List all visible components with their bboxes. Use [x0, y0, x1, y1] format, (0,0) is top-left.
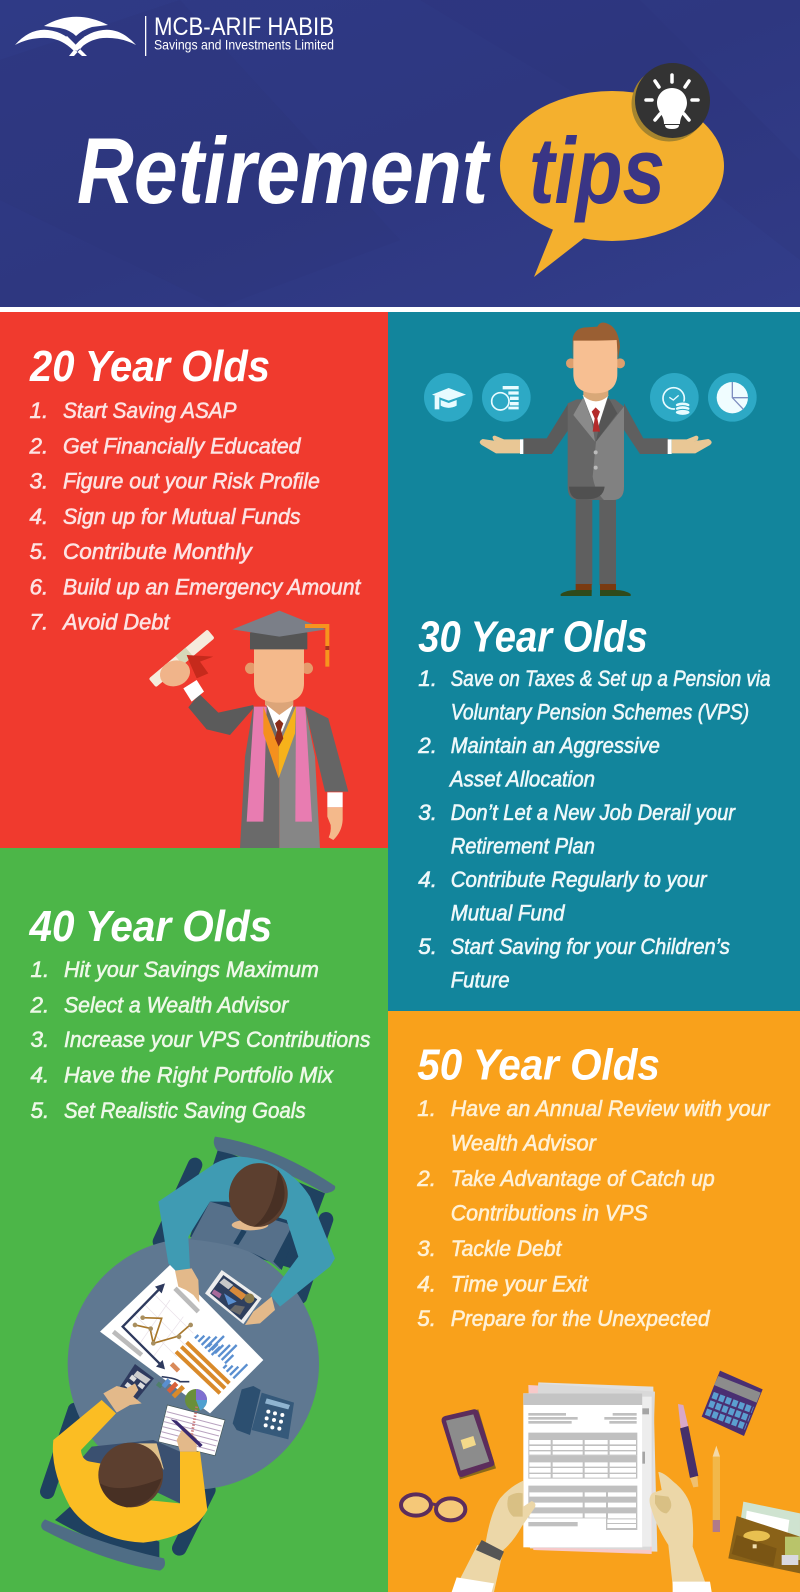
list: 5. [30, 1098, 49, 1123]
list: 4. [30, 1062, 49, 1088]
list: Contribute Regularly to your [451, 867, 708, 892]
icon: clock and coins [650, 373, 699, 422]
icon: pie chart [708, 373, 757, 422]
logo text: Savings and Investments Limited [154, 36, 334, 52]
list: Time your Exit [451, 1272, 589, 1296]
list: Hit your Savings Maximum [64, 957, 319, 982]
illustration: paperwork on desk [401, 1371, 800, 1592]
list: 1. [30, 957, 49, 982]
list: 3. [30, 468, 48, 494]
list: Voluntary Pension Schemes (VPS) [451, 699, 749, 724]
list [416, 1096, 771, 1331]
list: 1. [30, 398, 48, 423]
list: 3. [418, 800, 437, 825]
list [417, 666, 770, 992]
list: Contribute Monthly [63, 539, 254, 564]
list: Start Saving ASAP [63, 398, 236, 423]
hands [453, 1472, 705, 1592]
heading: 20 Year Olds [29, 342, 270, 391]
list: 1. [418, 666, 437, 691]
list: 5. [418, 934, 437, 959]
document with charts [100, 1265, 263, 1413]
list: 2. [30, 992, 49, 1018]
list: Have an Annual Review with your [451, 1096, 771, 1121]
icon: light bulb [632, 63, 710, 142]
panel: 50 year olds [388, 1011, 800, 1592]
list: 2. [416, 1166, 436, 1191]
list: 4. [30, 504, 48, 529]
list: Tackle Debt [451, 1236, 563, 1261]
calculator [120, 1364, 154, 1400]
list: 2. [28, 434, 48, 458]
list: 4. [418, 867, 437, 892]
list: Sign up for Mutual Funds [63, 504, 300, 529]
illustration: meeting at round table [41, 1137, 335, 1571]
panel: header [0, 0, 800, 307]
list: Build up an Emergency Amount [63, 574, 362, 600]
list: Mutual Fund [451, 900, 566, 925]
list: Retirement Plan [451, 833, 595, 858]
glasses [401, 1494, 465, 1520]
list: 2. [417, 733, 437, 758]
heading: 50 Year Olds [417, 1040, 660, 1090]
list: Set Realistic Saving Goals [64, 1098, 306, 1123]
list: 5. [30, 539, 48, 564]
pencil [713, 1446, 720, 1532]
list: Take Advantage of Catch up [451, 1166, 715, 1191]
list: Maintain an Aggressive [451, 733, 660, 758]
illustration: graduate [149, 611, 348, 848]
list: Avoid Debt [61, 610, 171, 634]
icon: graduation cap [424, 373, 473, 422]
icon: logo bird [15, 17, 136, 56]
list: Wealth Advisor [451, 1130, 597, 1156]
list: Asset Allocation [448, 766, 595, 791]
list: Figure out your Risk Profile [63, 468, 320, 494]
list: Have the Right Portfolio Mix [64, 1062, 334, 1088]
list: Increase your VPS Contributions [64, 1027, 370, 1052]
list: 3. [417, 1236, 436, 1261]
panel: 20 year olds [0, 312, 388, 848]
list: 7. [30, 610, 48, 634]
list [28, 398, 362, 634]
heading: 40 Year Olds [29, 902, 272, 951]
stacked papers [523, 1382, 657, 1554]
panel: 40 year olds [0, 848, 388, 1592]
list: Select a Wealth Advisor [64, 992, 290, 1018]
list [30, 957, 370, 1123]
speech bubble with tips [500, 91, 724, 277]
pen [678, 1404, 698, 1487]
logo text [154, 13, 334, 52]
list: Don’t Let a New Job Derail your [451, 800, 736, 825]
icon: coins [482, 373, 531, 422]
list: 4. [417, 1272, 436, 1296]
notebook [158, 1405, 225, 1456]
calculator [702, 1371, 763, 1436]
logo text: MCB-ARIF HABIB [154, 13, 334, 41]
logo [15, 13, 334, 56]
list: Contributions in VPS [451, 1200, 648, 1226]
heading: 30 Year Olds [418, 612, 648, 662]
list: Future [451, 967, 510, 992]
panel: 30 year olds [388, 312, 800, 1011]
list: Start Saving for your Children’s [451, 934, 730, 959]
list: 1. [417, 1096, 436, 1121]
title: Retirement: Retirement [77, 118, 491, 223]
wallet [728, 1502, 800, 1573]
phone [441, 1409, 496, 1479]
tablet [205, 1270, 262, 1324]
telephone [233, 1386, 294, 1439]
list: Get Financially Educated [63, 434, 302, 458]
list: Prepare for the Unexpected [451, 1306, 711, 1331]
illustration: businessman [424, 322, 757, 596]
list: 5. [417, 1306, 436, 1331]
list: 3. [30, 1027, 49, 1052]
speech bubble with tips: tips [529, 118, 665, 223]
list: 6. [30, 574, 48, 600]
